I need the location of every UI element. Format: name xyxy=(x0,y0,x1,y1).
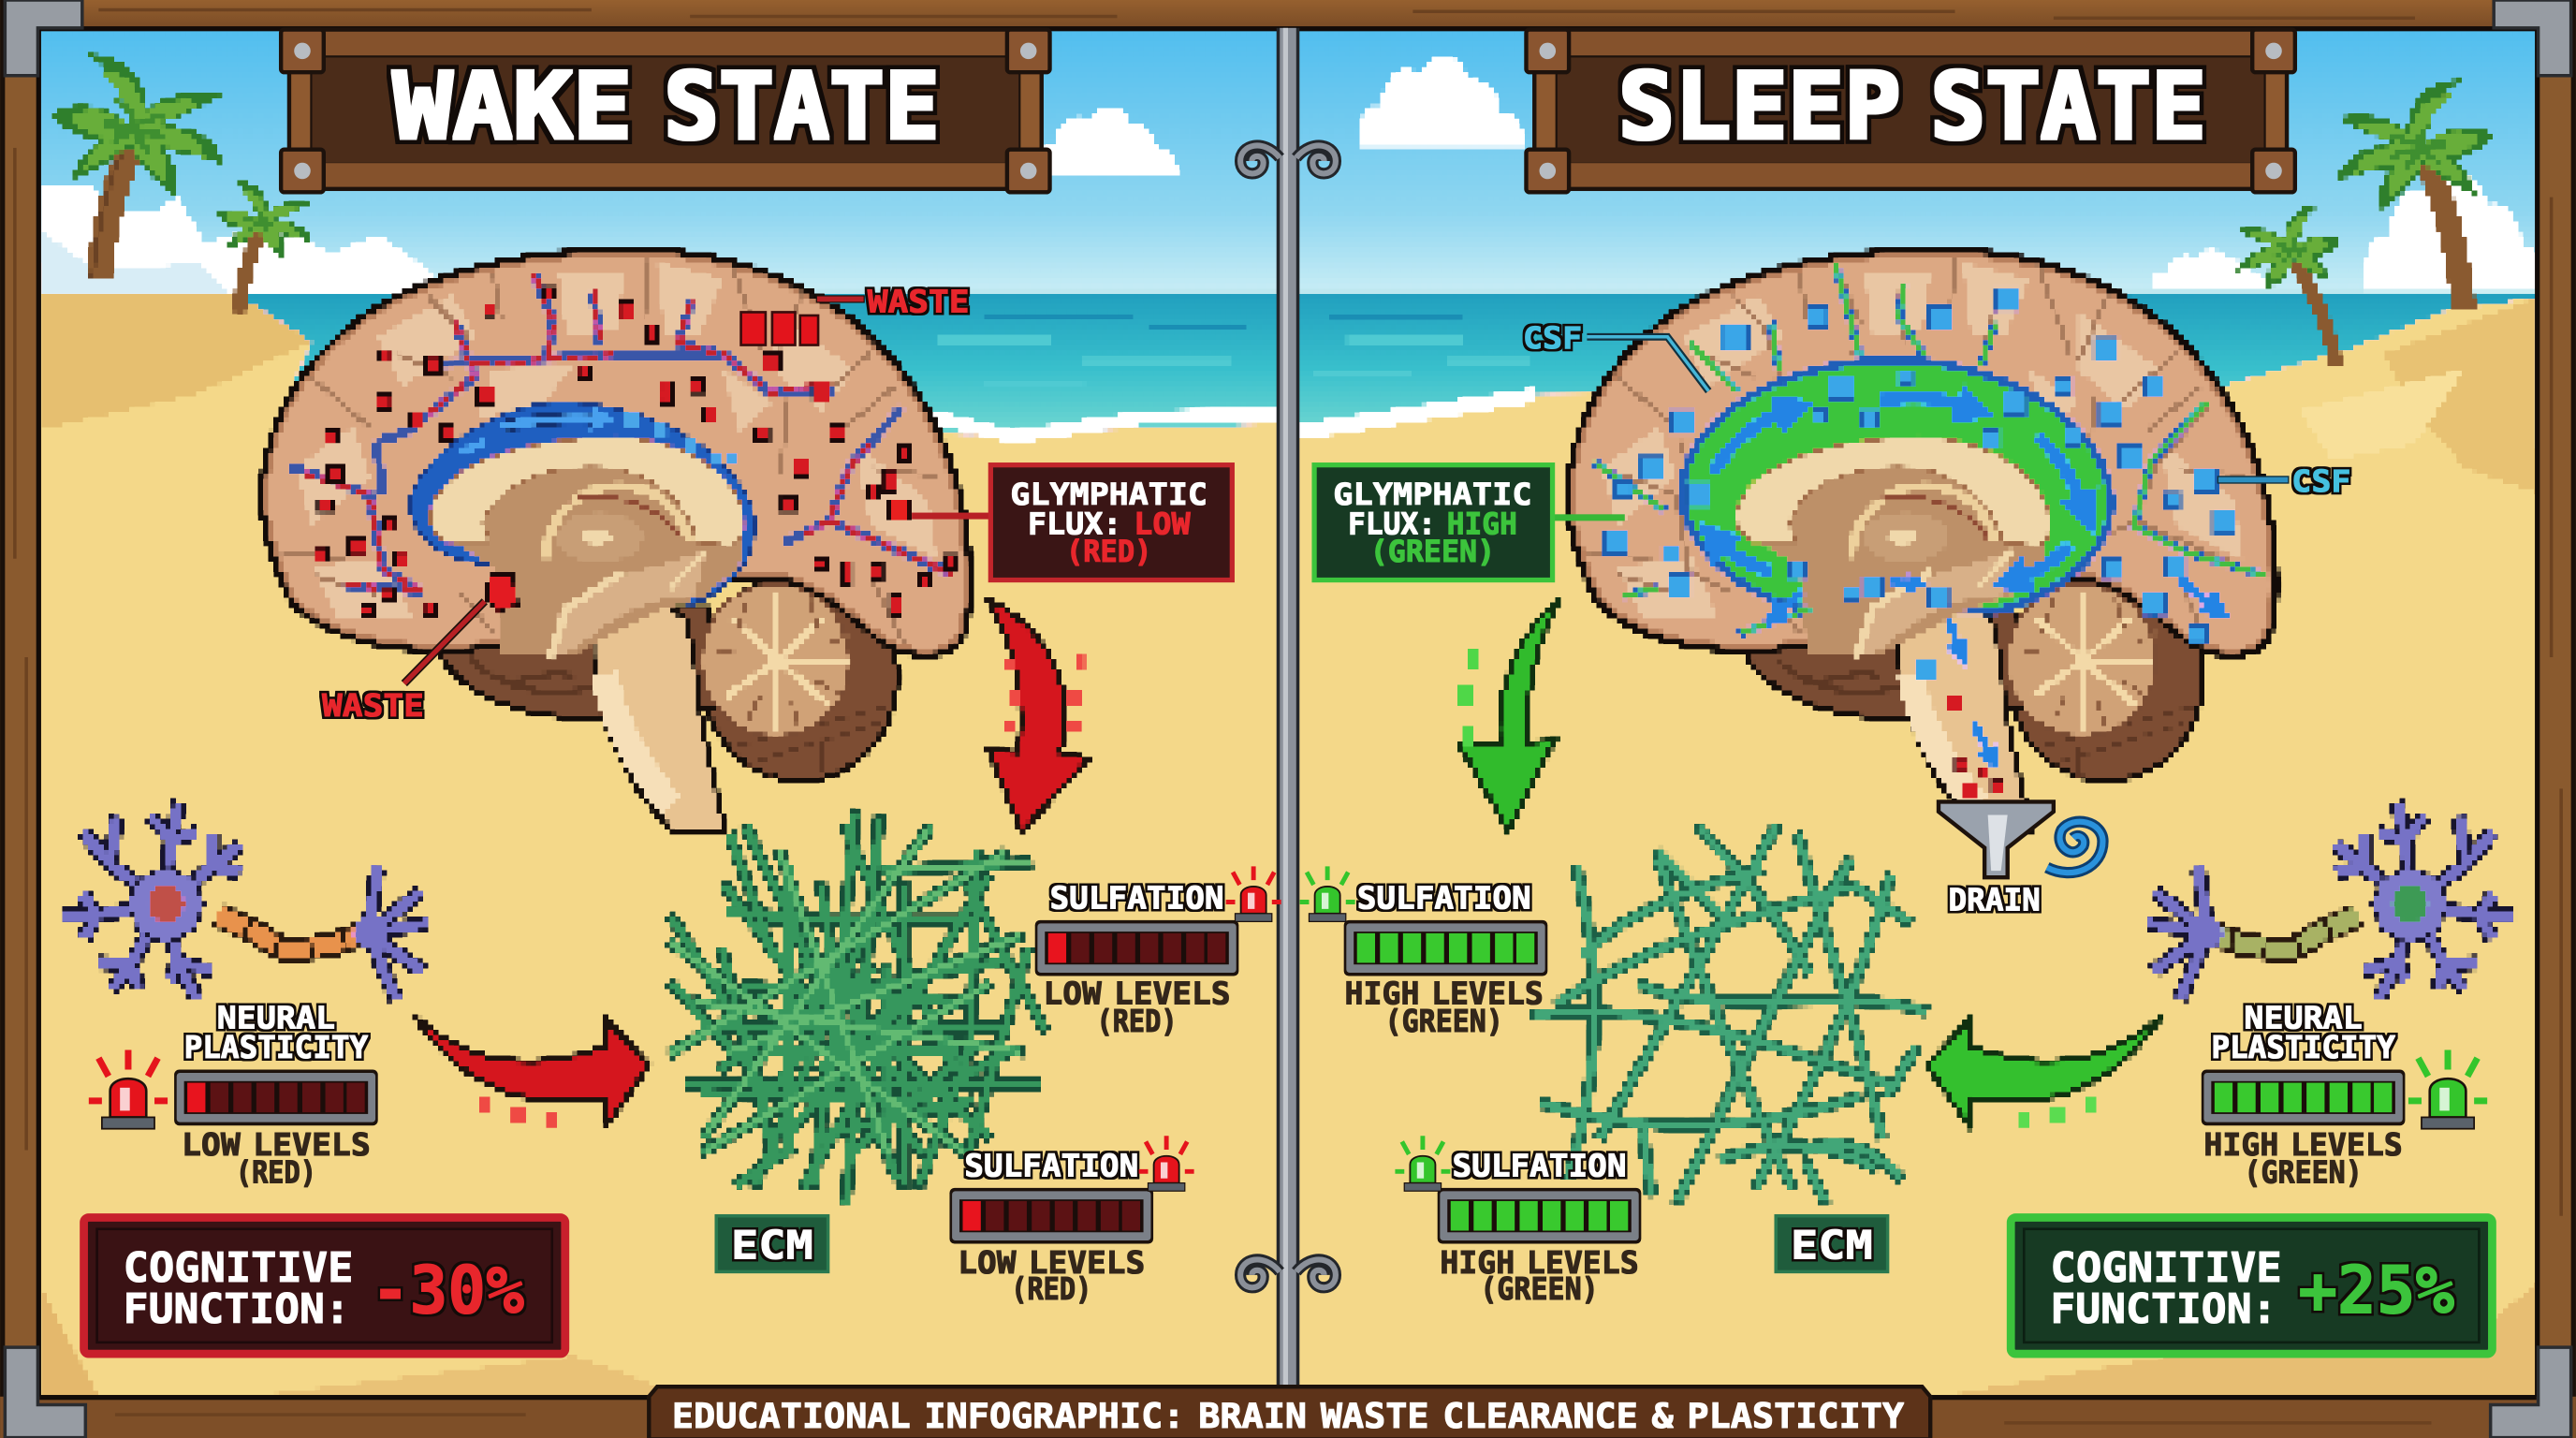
wake neural plasticity meter: LOW LEVELS xyxy=(182,1126,371,1163)
alarm: wake sulfation bottom xyxy=(1139,1136,1194,1191)
heading: sleep state sign: SLEEP xyxy=(1618,53,1901,160)
callout: glymphatic flux high: GLYMPHATIC xyxy=(1333,478,1532,512)
callout: glymphatic flux low: GLYMPHATIC xyxy=(1010,478,1208,512)
wake waste clump large xyxy=(487,575,518,613)
sleep neural plasticity meter: PLASTICITY xyxy=(2211,1029,2395,1065)
sleep sulfation meter top: (GREEN) xyxy=(1385,1003,1503,1039)
heading: sleep state sign: STATE xyxy=(1930,53,2206,160)
sleep sulfation meter top xyxy=(1344,880,1547,1039)
wake waste square xyxy=(889,500,910,521)
callout: glymphatic flux low: (RED) xyxy=(1066,536,1151,569)
sleep neural plasticity meter: NEURAL xyxy=(2244,1000,2363,1036)
wake sulfation meter top: SULFATION xyxy=(1050,880,1224,917)
sleep sulfation meter top: HIGH LEVELS xyxy=(1345,975,1544,1011)
result: cognitive function +25% xyxy=(2011,1217,2492,1354)
heading: wake state sign: STATE xyxy=(664,53,940,160)
wake label: waste top xyxy=(741,283,970,345)
arrow: red to ECM xyxy=(414,1016,649,1125)
result: cognitive function -30% xyxy=(84,1217,565,1354)
sleep neural plasticity meter: HIGH LEVELS xyxy=(2203,1126,2403,1163)
alarm: sleep plasticity xyxy=(2408,1049,2487,1129)
wake sulfation meter top: LOW LEVELS xyxy=(1044,975,1231,1011)
arrow: red down xyxy=(989,600,1088,831)
sleep green flux arc xyxy=(1682,360,2111,611)
wake sulfation meter top xyxy=(1035,880,1238,1039)
wake sulfation meter bottom: SULFATION xyxy=(964,1148,1138,1184)
callout: glymphatic flux high: FLUX: HIGH xyxy=(1348,507,1517,541)
wake neural plasticity meter: NEURAL xyxy=(217,1000,335,1036)
wake red waste veins xyxy=(304,274,955,592)
callout: glymphatic flux low xyxy=(912,465,1232,580)
alarm: wake plasticity xyxy=(89,1049,168,1129)
wake neural plasticity meter xyxy=(174,1000,378,1191)
neuron left xyxy=(61,801,427,999)
result: cognitive function -30%: COGNITIVE xyxy=(124,1244,353,1292)
sleep brain xyxy=(1568,250,2276,829)
wake waste clumps xyxy=(315,287,956,616)
neuron right xyxy=(2149,801,2515,999)
label: drain: DRAIN xyxy=(1949,881,2041,917)
wake sulfation meter bottom: LOW LEVELS xyxy=(958,1244,1145,1281)
sleep label: CSF left: CSF xyxy=(1523,322,1582,356)
ECM label left xyxy=(716,1216,828,1271)
icon: swirl xyxy=(2047,822,2102,873)
ornament: top scrolls highlight xyxy=(1240,145,1336,173)
clouds xyxy=(39,56,2550,292)
callout: glymphatic flux high: (GREEN) xyxy=(1370,536,1495,569)
heading: sleep state sign xyxy=(1526,30,2295,192)
sleep blue channels xyxy=(1593,263,2263,634)
sleep label: CSF right: CSF xyxy=(2291,465,2351,499)
ornament: bottom scrolls highlight xyxy=(1240,1259,1336,1287)
wake flow arrows xyxy=(461,418,598,452)
arrow: green down xyxy=(1459,598,1560,829)
result: cognitive function +25%: COGNITIVE xyxy=(2050,1244,2282,1292)
sleep sulfation meter top: SULFATION xyxy=(1357,880,1531,917)
drain funnel xyxy=(1939,801,2102,917)
ECM tangled left xyxy=(674,816,1044,1199)
palm trees left xyxy=(52,54,311,312)
wake sulfation meter bottom: (RED) xyxy=(1011,1270,1091,1307)
wake neural plasticity meter: (RED) xyxy=(236,1154,316,1191)
sleep neural plasticity meter xyxy=(2202,1000,2405,1191)
wake label: waste bottom: WASTE xyxy=(322,687,424,724)
wake ventricle arc xyxy=(409,403,754,605)
result: cognitive function -30%: FUNCTION: xyxy=(124,1285,350,1333)
result: cognitive function -30%: -30% xyxy=(372,1252,524,1328)
result: cognitive function +25%: FUNCTION: xyxy=(2050,1285,2277,1333)
wake ventricle small squares xyxy=(626,414,736,465)
wake label: waste bottom xyxy=(322,601,485,724)
sleep green channels xyxy=(1593,263,2263,634)
footer banner: EDUCATIONAL INFOGRAPHIC: BRAIN WASTE CLEARANCE & PLASTICITY xyxy=(672,1396,1905,1436)
sleep sulfation meter bottom: HIGH LEVELS xyxy=(1440,1244,1639,1281)
wake sulfation meter top: (RED) xyxy=(1097,1003,1178,1039)
sleep sulfation meter bottom: SULFATION xyxy=(1453,1148,1627,1184)
wake label: waste top: WASTE xyxy=(868,283,970,319)
ECM label right: ECM xyxy=(1791,1222,1873,1268)
ornament: bottom scrolls xyxy=(1240,1259,1336,1287)
ECM lattice right xyxy=(1536,829,1922,1199)
sleep label: CSF left xyxy=(1523,322,1708,391)
sleep label: CSF right xyxy=(2217,465,2351,499)
wake brain xyxy=(261,250,970,829)
sleep CSF particles xyxy=(1605,287,2236,681)
center divider pole xyxy=(1240,28,1336,1392)
alarm: wake sulfation top xyxy=(1226,866,1281,921)
callout: glymphatic flux low: FLUX: LOW xyxy=(1028,507,1192,541)
sleep sulfation meter bottom xyxy=(1438,1148,1641,1307)
alarm: sleep sulfation bottom xyxy=(1395,1136,1450,1191)
wake neural plasticity meter: PLASTICITY xyxy=(184,1029,368,1065)
ornament: top scrolls xyxy=(1240,145,1336,173)
ECM label right xyxy=(1776,1216,1888,1271)
arrow: green to ECM xyxy=(1927,1016,2162,1125)
ECM label left: ECM xyxy=(731,1222,813,1268)
heading: wake state sign xyxy=(281,30,1050,192)
callout: glymphatic flux high xyxy=(1314,465,1625,580)
heading: wake state sign: WAKE xyxy=(393,53,633,160)
wake sulfation meter bottom xyxy=(949,1148,1153,1307)
alarm: sleep sulfation top xyxy=(1300,866,1355,921)
palm trees right xyxy=(2237,80,2494,365)
sleep sulfation meter bottom: (GREEN) xyxy=(1480,1270,1599,1307)
result: cognitive function +25%: +25% xyxy=(2298,1252,2454,1328)
sleep flow arrows xyxy=(1714,398,2213,756)
sleep neural plasticity meter: (GREEN) xyxy=(2244,1154,2363,1191)
wake blue veins xyxy=(291,274,955,592)
sleep waste fragments xyxy=(1947,695,2002,797)
